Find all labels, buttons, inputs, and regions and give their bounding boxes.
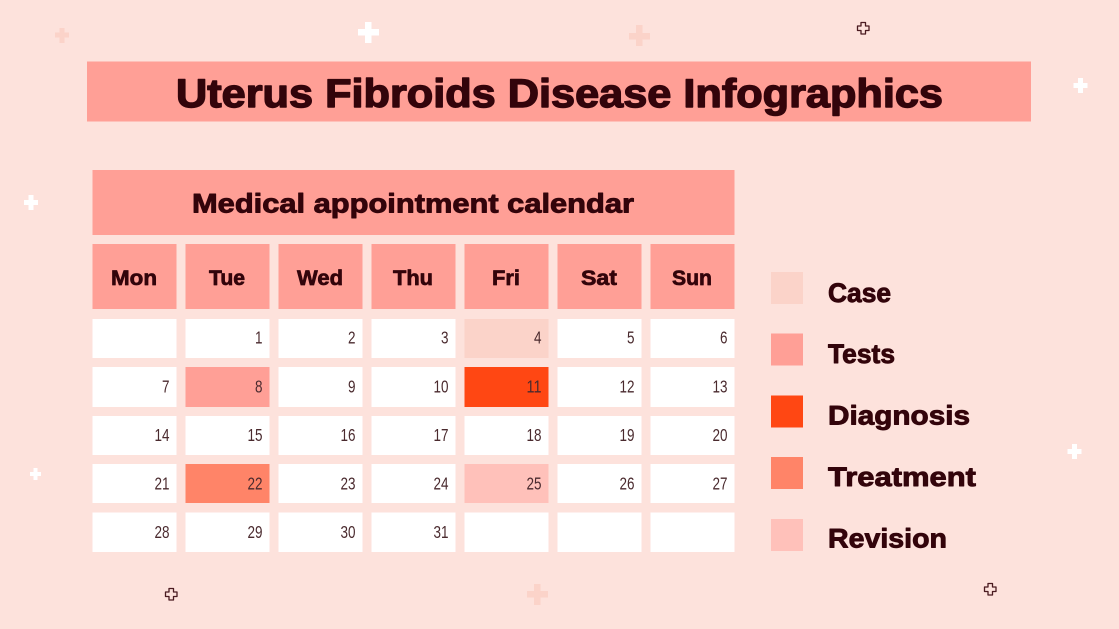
- revision appointment: 25: 25: [527, 475, 542, 494]
- header: Wed: Wed: [297, 267, 343, 290]
- treatment appointment: 22: [186, 464, 270, 503]
- calendar week 4: [92, 464, 734, 503]
- icon: pale plus top left: [55, 28, 69, 43]
- title: Uterus Fibroids Disease Infographics: [176, 72, 943, 116]
- legend: Revision: Revision: [828, 524, 947, 554]
- calendar heading: Medical appointment calendar: [192, 189, 635, 219]
- calendar week 3: 15: [248, 426, 263, 445]
- tests appointment: 8: 8: [255, 378, 262, 397]
- tests appointment: 8: [186, 367, 270, 407]
- header: Thu: [372, 244, 456, 309]
- revision appointment: 25: [464, 464, 548, 503]
- icon: pale plus top middle: [629, 25, 650, 46]
- header: Tue: [186, 244, 270, 309]
- icon: pale plus bottom middle: [527, 584, 548, 605]
- icon: outline plus bottom right: [984, 584, 996, 595]
- icon: white plus right: [1074, 78, 1088, 93]
- header: Fri: [464, 244, 548, 309]
- legend: Case: Case: [828, 278, 891, 308]
- header: Mon: Mon: [111, 267, 157, 290]
- calendar week 3: 14: [154, 426, 170, 445]
- legend: Revision: [771, 519, 947, 554]
- calendar week 4: 24: [433, 475, 449, 494]
- calendar week 4: 27: [713, 475, 727, 494]
- calendar week 2: 7: [162, 378, 169, 397]
- header: Mon: [92, 244, 176, 309]
- legend: Treatment: [771, 457, 976, 492]
- calendar week 2: 10: [434, 378, 448, 397]
- calendar week 2: 13: [713, 378, 727, 397]
- calendar week 5: 28: [155, 523, 169, 542]
- header: Fri: Fri: [492, 267, 520, 290]
- icon: small white plus left: [30, 468, 41, 480]
- diagnosis appointment: 11: [464, 367, 548, 407]
- legend: Treatment: Treatment: [828, 462, 976, 492]
- calendar week 2: 9: [348, 378, 355, 397]
- header: Sun: [650, 244, 734, 309]
- calendar week 1: 3: [441, 329, 448, 348]
- calendar week 3: 19: [620, 426, 635, 445]
- icon: outline plus top right: [858, 22, 869, 34]
- icon: white plus left: [24, 195, 38, 210]
- calendar week 4: 23: [341, 475, 356, 494]
- icon: outline plus bottom left: [166, 588, 177, 600]
- calendar week 1: 2: [348, 329, 355, 348]
- header: Sat: [558, 244, 642, 309]
- header: Sat: Sat: [581, 267, 617, 290]
- header: Tue: Tue: [209, 267, 245, 290]
- header: Sun: Sun: [672, 267, 712, 290]
- header: Wed: [278, 244, 362, 309]
- calendar week 5: 31: [434, 523, 448, 542]
- calendar heading: [92, 170, 734, 235]
- calendar week 3: 17: [434, 426, 448, 445]
- panel: legend: [771, 272, 976, 554]
- legend: Tests: [771, 334, 895, 369]
- calendar week 3: 18: [527, 426, 542, 445]
- calendar week 2: 12: [620, 378, 635, 397]
- calendar week 4: 26: [620, 475, 635, 494]
- panel: calendar: [92, 170, 734, 552]
- calendar week 2: [92, 367, 734, 407]
- calendar week 5: 30: [341, 523, 356, 542]
- treatment appointment: 22: 22: [248, 475, 263, 494]
- legend: Tests: Tests: [828, 339, 895, 369]
- legend: Diagnosis: [771, 396, 970, 430]
- calendar week 5: 29: [248, 523, 263, 542]
- calendar week 3: 16: [341, 426, 356, 445]
- calendar week 1: 6: [720, 329, 728, 348]
- icon: white plus lower right: [1068, 444, 1082, 459]
- calendar week 4: 21: [155, 475, 169, 494]
- calendar week 3: 20: [713, 426, 727, 445]
- icon: white plus top: [358, 22, 379, 43]
- calendar week 1: 1: [255, 329, 262, 348]
- calendar week 3: [92, 416, 734, 455]
- case appointment: 4: 4: [534, 329, 542, 348]
- calendar week 1: [92, 319, 734, 358]
- case appointment: 4: [464, 319, 548, 358]
- header: Thu: Thu: [393, 267, 433, 290]
- weekday headers: [92, 244, 734, 309]
- legend: Diagnosis: Diagnosis: [828, 400, 970, 430]
- legend: Case: [771, 272, 891, 308]
- diagnosis appointment: 11: 11: [527, 378, 542, 397]
- calendar week 5: [92, 512, 734, 552]
- title: [87, 62, 1031, 122]
- calendar week 1: 5: [627, 329, 635, 348]
